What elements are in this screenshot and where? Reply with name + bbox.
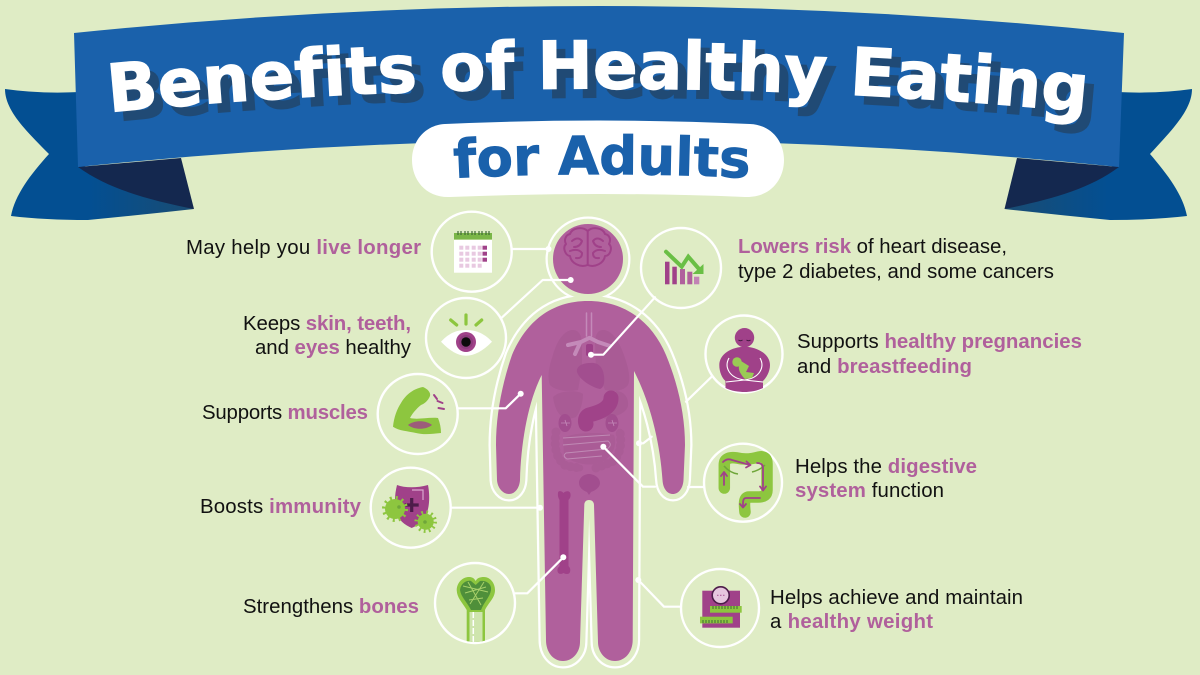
icon: bone cross-section xyxy=(435,563,515,645)
connector: muscle to arm xyxy=(458,391,524,408)
text: skin, teeth, eyes: and eyes healthy xyxy=(255,337,412,359)
title shadow text: Benefits of Healthy Eating xyxy=(122,47,1094,134)
connector: eye to head xyxy=(502,277,574,318)
text: digestive: Helps the digestive xyxy=(795,456,977,478)
title banner xyxy=(5,6,1192,220)
connector: immunity to body xyxy=(451,505,543,511)
trachea and bronchi xyxy=(568,313,610,354)
text: pregnancies xyxy=(797,331,1082,378)
text: bones: Strengthens bones xyxy=(243,596,419,618)
head xyxy=(553,224,623,294)
brain xyxy=(564,228,611,266)
body outline xyxy=(496,224,685,661)
subtitle text: for Adults xyxy=(453,134,748,178)
text: weight: Helps achieve and maintain xyxy=(770,587,1023,609)
small intestine xyxy=(563,433,615,465)
text: weight: a healthy weight xyxy=(770,611,933,633)
icon: scale and tape measure xyxy=(681,569,759,647)
right ribbon tail xyxy=(1004,89,1192,220)
text: lowers risk: type 2 diabetes, and some cancers xyxy=(738,261,1054,283)
icon: eye xyxy=(426,298,506,378)
icon: declining chart xyxy=(641,228,721,308)
text: skin, teeth, eyes: Keeps skin, teeth, xyxy=(243,313,411,335)
text: skin, teeth, eyes xyxy=(243,313,412,359)
text: immunity: Boosts immunity xyxy=(200,496,362,518)
ribbon main band xyxy=(74,6,1124,167)
left ribbon tail xyxy=(5,89,194,220)
connector: chart to heart xyxy=(588,297,655,358)
icon: immunity shield xyxy=(371,468,451,548)
text: digestive xyxy=(795,456,977,502)
icon: muscle xyxy=(378,374,458,454)
title text: Benefits of Healthy Eating xyxy=(110,38,1086,125)
text: pregnancies: and breastfeeding xyxy=(797,356,972,378)
text: weight xyxy=(770,587,1023,633)
text: digestive: system function xyxy=(795,480,944,502)
text: live longer: May help you live longer xyxy=(186,237,421,259)
liver xyxy=(553,391,583,419)
connector: digestive xyxy=(600,444,704,487)
connector: bones to femur xyxy=(515,554,566,593)
colon xyxy=(555,432,621,468)
text: muscles: Supports muscles xyxy=(202,402,368,424)
icon: calendar xyxy=(432,212,512,292)
stomach xyxy=(585,398,611,424)
bladder xyxy=(579,474,600,495)
lungs xyxy=(549,330,629,391)
subtitle pill xyxy=(412,120,784,197)
icon: digestive system xyxy=(704,444,782,522)
text: lowers risk xyxy=(738,236,1054,283)
intestine folds xyxy=(563,435,610,459)
text: lowers risk: Lowers risk of heart disease, xyxy=(738,236,1007,258)
connector: pregnancy xyxy=(636,377,712,446)
femur bone xyxy=(557,491,571,574)
pulmonary vessel xyxy=(586,344,593,356)
spleen lobe xyxy=(604,391,628,419)
connector: calendar to head xyxy=(512,246,552,252)
text: pregnancies: Supports healthy pregnancies xyxy=(797,331,1082,353)
left ribbon fold xyxy=(78,158,194,209)
right ribbon fold xyxy=(1004,158,1119,209)
icon: breastfeeding mother xyxy=(706,316,782,392)
human body figure xyxy=(496,224,685,661)
body silhouette xyxy=(496,301,685,661)
kidneys xyxy=(558,414,618,432)
heart xyxy=(577,363,604,389)
connector: weight xyxy=(635,577,680,607)
